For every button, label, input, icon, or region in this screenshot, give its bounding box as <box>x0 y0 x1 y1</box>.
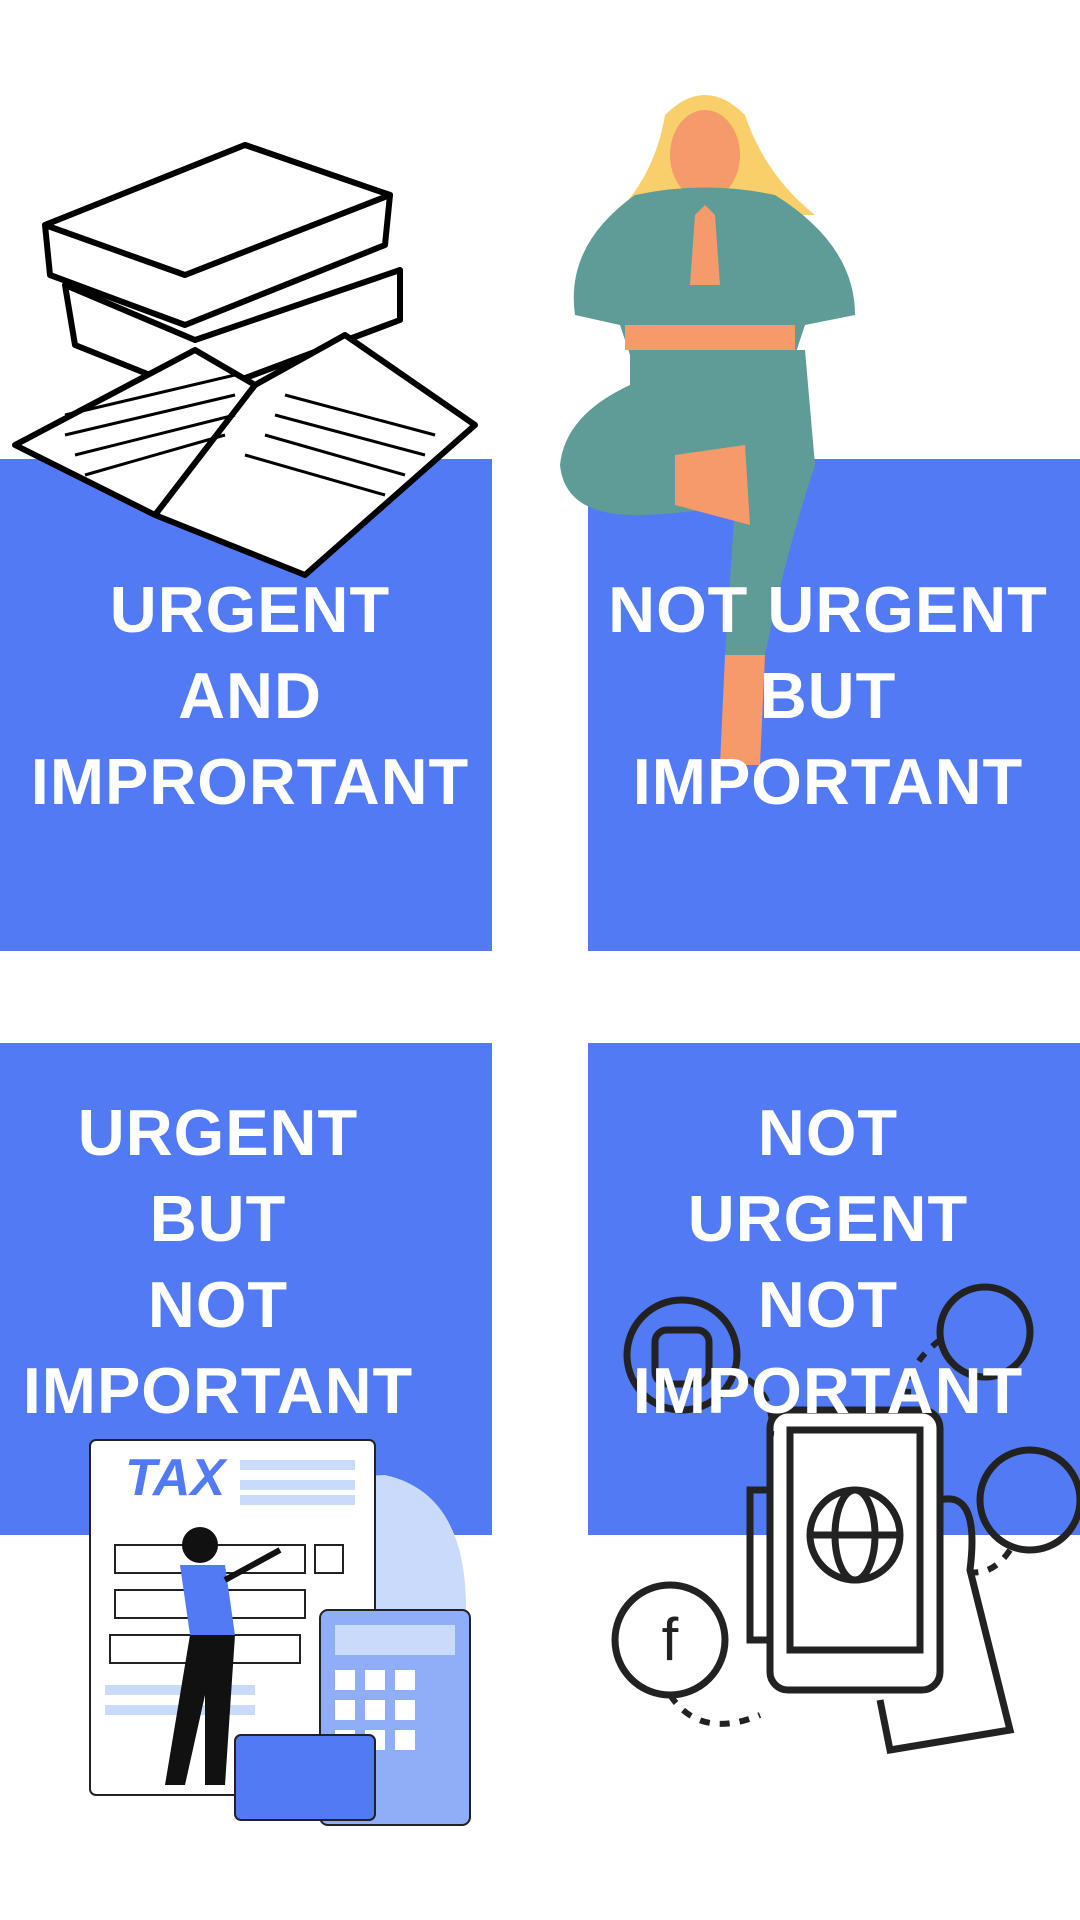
panel: urgent and important <box>0 459 492 951</box>
heading: not urgent but important <box>608 573 1048 818</box>
heading: urgent but not important <box>23 1096 413 1427</box>
heading: urgent and important: IMPRORTANT <box>31 745 469 818</box>
heading: urgent and important <box>31 573 469 818</box>
heading: not urgent not important: NOT <box>758 1268 898 1341</box>
heading: urgent and important: URGENT <box>110 573 390 646</box>
heading: not urgent not important: NOT <box>758 1096 898 1169</box>
panel: not urgent not important <box>588 1043 1080 1535</box>
icon: tax document: TAX <box>125 1449 228 1507</box>
icon: woman doing yoga <box>560 95 855 765</box>
heading: not urgent not important: URGENT <box>688 1182 968 1255</box>
panel: urgent but not important <box>0 1043 492 1535</box>
icon: phone with social media: f <box>662 1606 679 1673</box>
icon: tax document <box>89 1439 471 1826</box>
heading: urgent but not important: URGENT <box>78 1096 358 1169</box>
heading: not urgent but important: BUT <box>760 659 896 732</box>
heading: urgent but not important: BUT <box>150 1182 286 1255</box>
heading: not urgent but important: IMPORTANT <box>633 745 1023 818</box>
heading: urgent but not important: NOT <box>148 1268 288 1341</box>
heading: urgent but not important: IMPORTANT <box>23 1354 413 1427</box>
heading: urgent and important: AND <box>178 659 322 732</box>
icon: phone with social media <box>612 1284 1080 1754</box>
panel: not urgent but important <box>588 459 1080 951</box>
heading: not urgent not important: IMPORTANT <box>633 1354 1023 1427</box>
icon: books <box>12 142 478 578</box>
heading: not urgent but important: NOT URGENT <box>608 573 1048 646</box>
heading: not urgent not important <box>633 1096 1023 1427</box>
